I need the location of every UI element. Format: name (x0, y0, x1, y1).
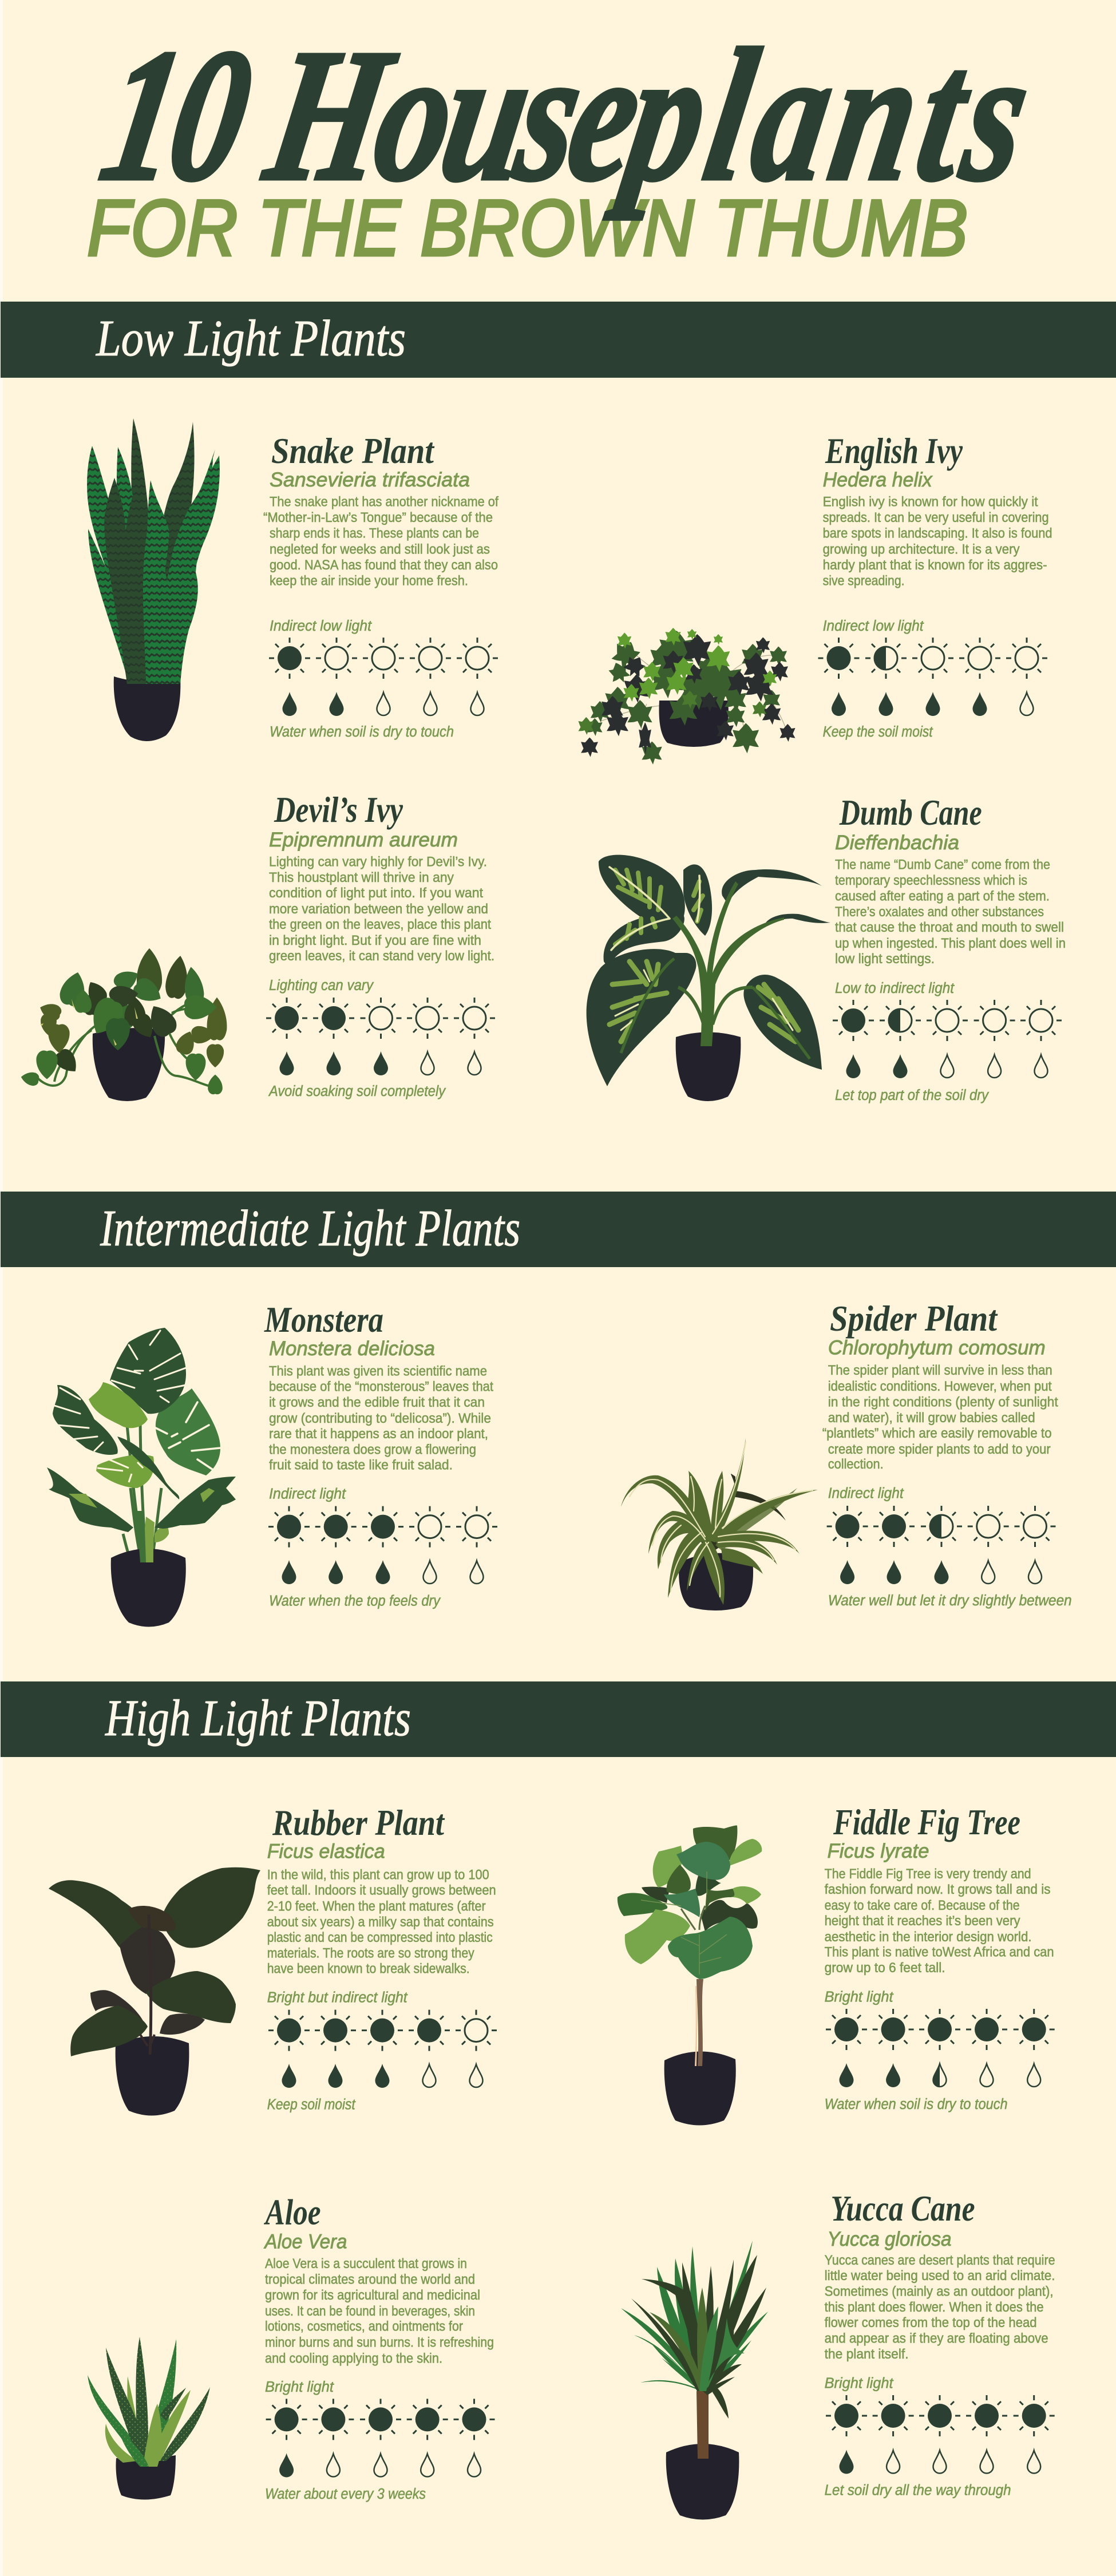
description: plastic and can be compressed into plastic (267, 1930, 493, 1945)
illustration: snake plant (87, 418, 220, 741)
description: because of the “monsterous” leaves that (269, 1379, 493, 1395)
water label: Let soil dry all the way through (825, 2483, 1011, 2499)
scientific name: Chlorophytum comosum (828, 1337, 1046, 1359)
description: sive spreading. (823, 573, 905, 589)
description: feet tall. Indoors it usually grows between (267, 1883, 496, 1898)
light rating suns (818, 638, 1047, 679)
plant name: Yucca Cane (831, 2188, 975, 2229)
panel: dumb cane (587, 792, 1066, 1103)
scientific name: Aloe Vera (264, 2231, 347, 2253)
light label: Indirect low light (270, 618, 372, 634)
water rating drops (832, 692, 1034, 716)
subtitle: for the brown thumb: FOR THE BROWN THUMB (87, 184, 968, 272)
description: spreads. It can be very useful in covering (823, 510, 1049, 525)
description: aesthetic in the interior design world. (825, 1929, 1032, 1945)
description: uses. It can be found in beverages, skin (265, 2304, 475, 2319)
panel: snake plant (87, 418, 498, 741)
illustration: fiddle fig tree (618, 1825, 762, 2126)
description (263, 494, 498, 589)
water rating drops (279, 1051, 481, 1075)
description: hardy plant that is known for its aggres- (823, 557, 1047, 573)
light label: Bright but indirect light (267, 1989, 408, 2005)
panel: devil's ivy (20, 789, 495, 1101)
water rating drops (282, 1560, 483, 1584)
description: and appear as if they are floating above (825, 2331, 1048, 2347)
plant name: Snake Plant (271, 430, 435, 471)
description: this plant does flower. When it does the (825, 2300, 1044, 2315)
description: The snake plant has another nickname of (270, 494, 498, 509)
water rating drops (839, 2063, 1040, 2087)
description: grow up to 6 feet tall. (825, 1960, 945, 1976)
description: negleted for weeks and still look just as (270, 541, 490, 557)
description: In the wild, this plant can grow up to 100 (267, 1867, 489, 1882)
description (835, 857, 1066, 967)
description (825, 2253, 1055, 2362)
light rating suns (266, 998, 495, 1039)
description: rare that it happens as an indoor plant, (269, 1426, 488, 1442)
light rating suns (269, 638, 498, 679)
section band: high light plants: High Light Plants (105, 1690, 411, 1747)
light rating suns (826, 2009, 1055, 2050)
light rating suns (266, 2399, 494, 2440)
description (269, 1363, 493, 1473)
description: it grows and the edible fruit that it can (269, 1395, 485, 1410)
plant name: Rubber Plant (272, 1802, 445, 1843)
description: more variation between the yellow and (269, 901, 488, 917)
scientific name: Hedera helix (823, 469, 933, 491)
description: height that it reaches it’s been very (825, 1913, 1020, 1929)
scientific name: Yucca gloriosa (828, 2228, 951, 2250)
illustration: english ivy (578, 628, 796, 765)
description: fruit said to taste like fruit salad. (269, 1457, 453, 1473)
description: The Fiddle Fig Tree is very trendy and (825, 1866, 1031, 1882)
description: “Mother-in-Law’s Tongue” because of the (263, 510, 493, 525)
scientific name: Sansevieria trifasciata (270, 469, 470, 491)
water label: Water well but let it dry slightly between (828, 1593, 1072, 1609)
description: 2-10 feet. When the plant matures (after (267, 1898, 486, 1914)
description: The name “Dumb Cane” come from the (835, 857, 1050, 872)
section band: intermediate light plants: Intermediate Light Plants (100, 1200, 520, 1257)
description: flower comes from the top of the head (825, 2315, 1037, 2330)
panel: aloe (88, 2192, 494, 2502)
water rating drops (846, 1054, 1047, 1078)
description: tropical climates around the world and (265, 2272, 475, 2287)
description: Sometimes (mainly as an outdoor plant), (825, 2284, 1054, 2300)
section band: high light plants (1, 1681, 1116, 1757)
illustration: spider plant (621, 1438, 818, 1611)
water label: Water when soil is dry to touch (825, 2096, 1008, 2112)
scientific name: Ficus lyrate (828, 1840, 929, 1862)
water label: Water when the top feels dry (269, 1593, 441, 1609)
description: fashion forward now. It grows tall and is (825, 1882, 1051, 1897)
plant name: Spider Plant (830, 1298, 998, 1339)
description: The spider plant will survive in less than (828, 1363, 1052, 1378)
description: easy to take care of. Because of the (825, 1898, 1020, 1913)
description: sharp ends it has. These plants can be (270, 526, 479, 541)
plant name: Aloe (263, 2192, 321, 2232)
water rating drops (840, 1560, 1042, 1584)
illustration: monstera (47, 1328, 236, 1627)
description: and water), it will grow babies called (828, 1410, 1035, 1426)
description: have been known to break sidewalks. (267, 1961, 470, 1977)
description (267, 1867, 496, 1977)
water label: Keep soil moist (267, 2097, 356, 2113)
illustration: rubber plant (49, 1867, 260, 2115)
light label: Indirect light (828, 1486, 904, 1502)
description: Aloe Vera is a succulent that grows in (265, 2256, 467, 2272)
description: caused after eating a part of the stem. (835, 889, 1050, 904)
light rating suns (268, 1506, 497, 1548)
water label: Water about every 3 weeks (265, 2486, 426, 2502)
description: collection. (828, 1457, 884, 1472)
scientific name: Epipremnum aureum (269, 829, 458, 851)
description: lotions, cosmetics, and ointments for (265, 2319, 463, 2334)
description: good. NASA has found that they can also (270, 557, 498, 573)
water rating drops (283, 692, 484, 716)
description (825, 1866, 1054, 1976)
panel: english ivy (578, 430, 1052, 765)
plant name: Monstera (264, 1299, 383, 1340)
description (269, 854, 494, 964)
illustration: aloe (88, 2337, 210, 2500)
description: minor burns and sun burns. It is refreshing (265, 2335, 494, 2351)
light label: Indirect low light (823, 618, 924, 634)
description: temporary speechlessness which is (835, 873, 1027, 888)
description: up when ingested. This plant does well in (835, 936, 1066, 951)
description: the monestera does grow a flowering (269, 1442, 476, 1458)
illustration: yucca cane (621, 2241, 768, 2519)
water rating drops (282, 2064, 483, 2088)
scientific name: Dieffenbachia (835, 832, 959, 854)
description (265, 2256, 494, 2366)
description: keep the air inside your home fresh. (270, 573, 468, 589)
plant name: Fiddle Fig Tree (833, 1802, 1020, 1842)
description: This plant was given its scientific name (269, 1363, 487, 1379)
plant name: Dumb Cane (839, 792, 982, 833)
light rating suns (268, 2010, 497, 2051)
description: create more spider plants to add to your (828, 1442, 1051, 1457)
water label: Avoid soaking soil completely (268, 1083, 446, 1099)
description: Yucca canes are desert plants that require (825, 2253, 1055, 2268)
light rating suns (827, 1506, 1055, 1547)
description: about six years) a milky sap that contains (267, 1914, 494, 1930)
description: grow (contributing to “delicosa”). While (269, 1411, 491, 1426)
water rating drops (279, 2453, 481, 2477)
panel: rubber plant (49, 1802, 497, 2115)
illustration: dumb cane (587, 855, 830, 1101)
description: in bright light. But if you are fine with (269, 933, 481, 948)
light label: Bright light (265, 2379, 334, 2395)
description: the green on the leaves, place this plant (269, 917, 491, 932)
description: in the right conditions (plenty of sunlight (828, 1395, 1058, 1410)
description: growing up architecture. It is a very (823, 541, 1020, 557)
panel: yucca cane (621, 2188, 1055, 2519)
light label: Lighting can vary (269, 978, 374, 994)
description: that cause the throat and mouth to swell (835, 920, 1064, 935)
scientific name: Monstera deliciosa (269, 1338, 435, 1360)
description: grown for its agricultural and medicinal (265, 2288, 480, 2303)
panel: monstera (47, 1299, 497, 1627)
description: little water being used to an arid climate. (825, 2268, 1055, 2284)
plant name: Devil’s Ivy (274, 789, 403, 830)
description: bare spots in landscaping. It also is found (823, 526, 1052, 541)
description: This plant is native toWest Africa and can (825, 1945, 1054, 1960)
description: condition of light put into. If you want (269, 885, 483, 901)
description: idealistic conditions. However, when put (828, 1379, 1052, 1394)
light label: Bright light (825, 1989, 894, 2005)
light label: Bright light (825, 2376, 894, 2392)
description: green leaves, it can stand very low light. (269, 948, 494, 964)
water label: Let top part of the soil dry (835, 1087, 990, 1103)
water rating drops (839, 2450, 1040, 2474)
description: “plantlets” which are easily removable to (822, 1426, 1052, 1441)
light label: Indirect light (269, 1486, 346, 1502)
description: and cooling applying to the skin. (265, 2351, 442, 2366)
section band: low light plants: Low Light Plants (95, 310, 406, 367)
panel: fiddle fig tree (618, 1802, 1055, 2126)
light rating suns (833, 1000, 1062, 1041)
light label: Low to indirect light (835, 980, 955, 996)
description: English ivy is known for how quickly it (823, 494, 1038, 509)
description (822, 1363, 1058, 1472)
water label: Keep the soil moist (823, 724, 933, 740)
water label: Water when soil is dry to touch (270, 724, 454, 740)
panel: spider plant (621, 1298, 1072, 1611)
section band: low light plants (1, 302, 1116, 378)
illustration: devil's ivy (20, 948, 227, 1101)
plant name: English Ivy (825, 430, 963, 471)
light rating suns (826, 2395, 1055, 2436)
description: the plant itself. (825, 2347, 909, 2362)
description: There’s oxalates and other substances (835, 904, 1044, 920)
description: This houstplant will thrive in any (269, 870, 454, 885)
scientific name: Ficus elastica (267, 1841, 385, 1863)
description: Lighting can vary highly for Devil’s Ivy. (269, 854, 487, 870)
description: low light settings. (835, 951, 935, 967)
section band: intermediate light plants (1, 1192, 1116, 1267)
description: materials. The roots are so strong they (267, 1946, 474, 1961)
description (823, 494, 1052, 589)
